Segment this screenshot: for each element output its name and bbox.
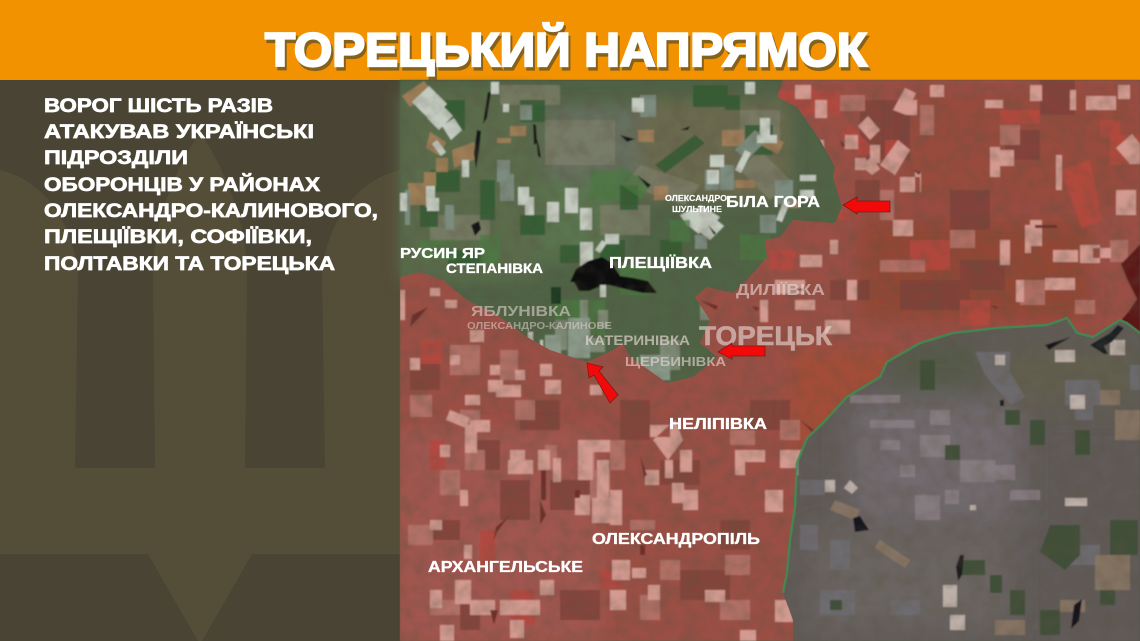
text block: attack summary: ПЛЕЩІЇВКИ, СОФІЇВКИ, <box>44 227 312 248</box>
soft mottling texture <box>400 80 1140 641</box>
icon: trident watermark <box>0 80 400 641</box>
icon: dark red reservoir <box>1120 244 1140 332</box>
map: satellite base with occupied and free zones <box>400 80 1140 641</box>
label: Олександро-Шультине: ШУЛЬТИНЕ <box>672 204 722 214</box>
title: ТОРЕЦЬКИЙ НАПРЯМОК <box>267 26 869 80</box>
panel: left text panel with trident <box>0 80 400 641</box>
text block: attack summary: ОБОРОНЦІВ У РАЙОНАХ <box>44 174 320 196</box>
front line <box>783 318 1140 593</box>
icon: reservoir lake <box>570 257 657 293</box>
label: Катеринівка: КАТЕРИНІВКА <box>585 332 690 348</box>
label: Яблунівка: ЯБЛУНІВКА <box>471 304 572 320</box>
label: Торецьк: ТОРЕЦЬК <box>699 321 833 351</box>
arrow: toward Bila Hora <box>843 197 890 214</box>
map labels: occupied settlements <box>467 282 833 369</box>
label: Русин Яр: РУСИН ЯР <box>400 245 485 262</box>
label: Щербинівка: ЩЕРБИНІВКА <box>625 354 727 369</box>
label: Степанівка: СТЕПАНІВКА <box>446 261 543 276</box>
arrow: toward Kateryniivka <box>587 363 618 403</box>
map zone: city and farmland to south-east <box>780 310 1140 641</box>
label: Неліпівка: НЕЛІПІВКА <box>669 416 767 433</box>
text block: attack summary: ПОЛТАВКИ ТА ТОРЕЦЬКА <box>44 254 335 275</box>
map zone: occupied territory with red tint <box>400 80 1140 641</box>
label: Плещіївка: ПЛЕЩІЇВКА <box>609 255 712 272</box>
label: Дилiївка: ДИЛІЇВКА <box>736 282 825 299</box>
text block: attack summary <box>44 96 378 275</box>
map labels: clear settlements <box>400 193 820 576</box>
text block: attack summary: ПІДРОЗДІЛИ <box>44 148 188 169</box>
title: ТОРЕЦЬКИЙ НАПРЯМОК <box>265 23 867 76</box>
text block: attack summary: ОЛЕКСАНДРО-КАЛИНОВОГО, <box>44 201 378 222</box>
label: Архангельське: АРХАНГЕЛЬСЬКЕ <box>428 559 583 576</box>
map zone: free territory farmland <box>400 80 1140 641</box>
text block: attack summary: ВОРОГ ШІСТЬ РАЗІВ <box>44 96 273 117</box>
text block: attack summary: АТАКУВАВ УКРАЇНСЬКІ <box>44 122 314 143</box>
label: Олександро-Калинове: ОЛЕКСАНДРО-КАЛИНОВЕ <box>467 320 612 332</box>
label: Біла Гора: БІЛА ГОРА <box>726 194 820 211</box>
header banner <box>0 0 1140 80</box>
label: Олександро-Шультине: ОЛЕКСАНДРО <box>665 193 727 203</box>
label: Олександро-Шультине <box>665 193 727 214</box>
arrow: toward Toretsk <box>718 343 765 359</box>
label: Олександропіль: ОЛЕКСАНДРОПІЛЬ <box>592 531 760 548</box>
